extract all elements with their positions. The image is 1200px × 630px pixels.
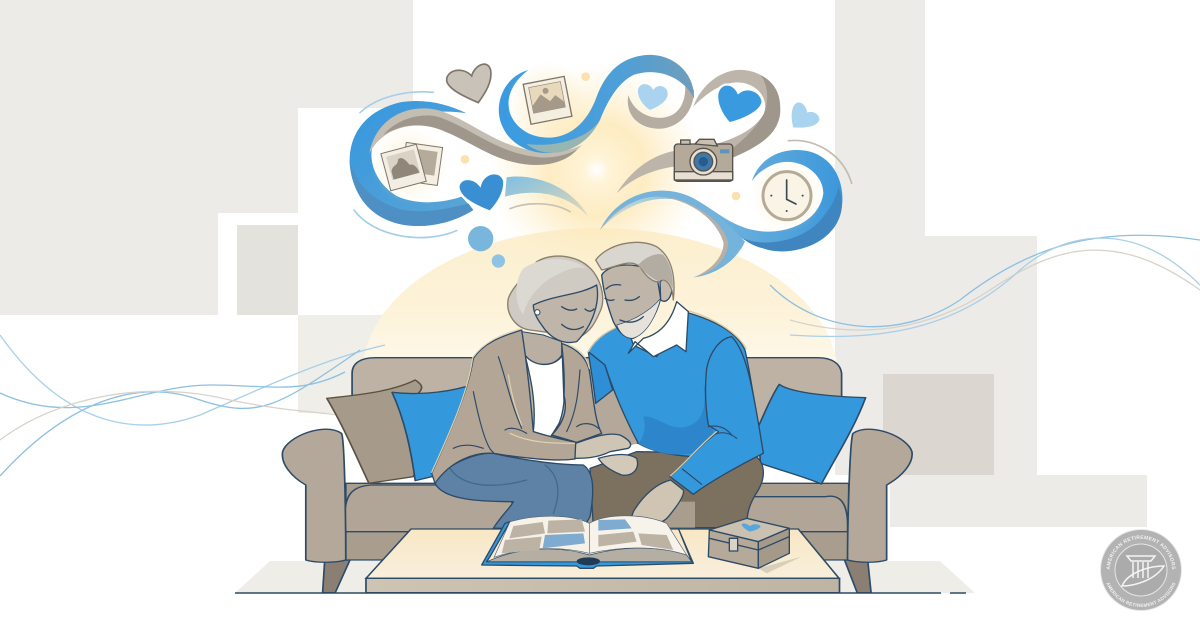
logo seal [1100, 529, 1182, 611]
logo seal: AMERICAN RETIREMENT ADVISORS [1106, 582, 1176, 607]
swirl: tail [600, 191, 745, 277]
icon: grey heart [447, 64, 491, 103]
thought bubbles [468, 226, 493, 251]
sofa legs [323, 560, 871, 593]
swirl: right grey curl [617, 70, 780, 193]
woman: dark hem shadow [551, 423, 565, 439]
icon: pale blue heart far right [792, 102, 819, 128]
album cover [482, 522, 693, 568]
man: sweater [588, 312, 763, 457]
album spine [577, 557, 600, 565]
thought swirl of memories [349, 55, 852, 277]
sofa [282, 358, 912, 593]
coffee table [366, 529, 840, 593]
swirl: upper blue ribbon [499, 55, 694, 153]
photo halos [508, 62, 585, 138]
icon: clock [763, 172, 811, 220]
swirl: grey loop [628, 83, 694, 129]
blue pillow right [758, 384, 866, 484]
woman: cardigan left side [432, 330, 577, 483]
left flowing wave lines [0, 335, 385, 476]
album blue photos [543, 519, 632, 548]
seat cushions [345, 485, 523, 532]
woman: leg divider [450, 465, 558, 513]
woman: neck [522, 332, 562, 364]
man: sweater shadow [638, 382, 713, 455]
blue pillow left [392, 387, 468, 481]
hands clasped [575, 434, 638, 475]
icon: camera [674, 139, 733, 181]
man: arm around woman [588, 352, 613, 403]
man: shirt and collar [628, 302, 688, 357]
album and keepsake box [482, 516, 802, 573]
sparkle dots [581, 72, 590, 81]
icon: light blue heart [638, 84, 668, 110]
album photos [502, 519, 673, 553]
floor line [235, 592, 966, 594]
cardigan highlights [432, 329, 589, 472]
icon: blue heart top right [717, 84, 763, 123]
man: head [596, 242, 674, 338]
accent strokes [354, 92, 852, 238]
central light [490, 63, 703, 277]
swirl: left fading ribbon [505, 177, 588, 217]
shoulder highlights [588, 311, 746, 476]
keepsake box [708, 518, 802, 573]
cardigan detail lines [453, 357, 598, 452]
glow dome behind the couple [362, 228, 838, 372]
icon: blue heart lower left [458, 173, 504, 212]
right flowing wave lines [770, 235, 1200, 336]
man: reaching hand [630, 480, 684, 528]
sofa seat seen between the legs [663, 502, 695, 528]
icon: photo stack [381, 142, 443, 191]
album page stack [487, 548, 692, 562]
man: sleeve [670, 337, 763, 494]
swirl: big left blue ribbon [350, 101, 473, 226]
swirl: long grey ribbon [369, 108, 582, 165]
woman: jeans [435, 453, 593, 528]
man: trousers [590, 452, 763, 528]
left sofa arm [282, 429, 346, 562]
icon: framed landscape photo [523, 76, 572, 124]
album left page [494, 516, 589, 557]
woman: head [508, 256, 603, 343]
sofa body [346, 483, 849, 560]
couple [432, 242, 763, 528]
taupe pillow [327, 380, 422, 483]
woman: white top [525, 355, 564, 437]
right sofa arm [848, 429, 912, 562]
album right page [589, 516, 687, 555]
logo seal: AMERICAN RETIREMENT ADVISORS [1106, 536, 1176, 570]
woman: cardigan right side [552, 343, 602, 442]
gap behind the couple [593, 390, 638, 452]
sofa back [352, 358, 842, 443]
swirl: lower right blue ribbon [603, 150, 842, 251]
man: cuff and sleeve detail [682, 426, 737, 484]
